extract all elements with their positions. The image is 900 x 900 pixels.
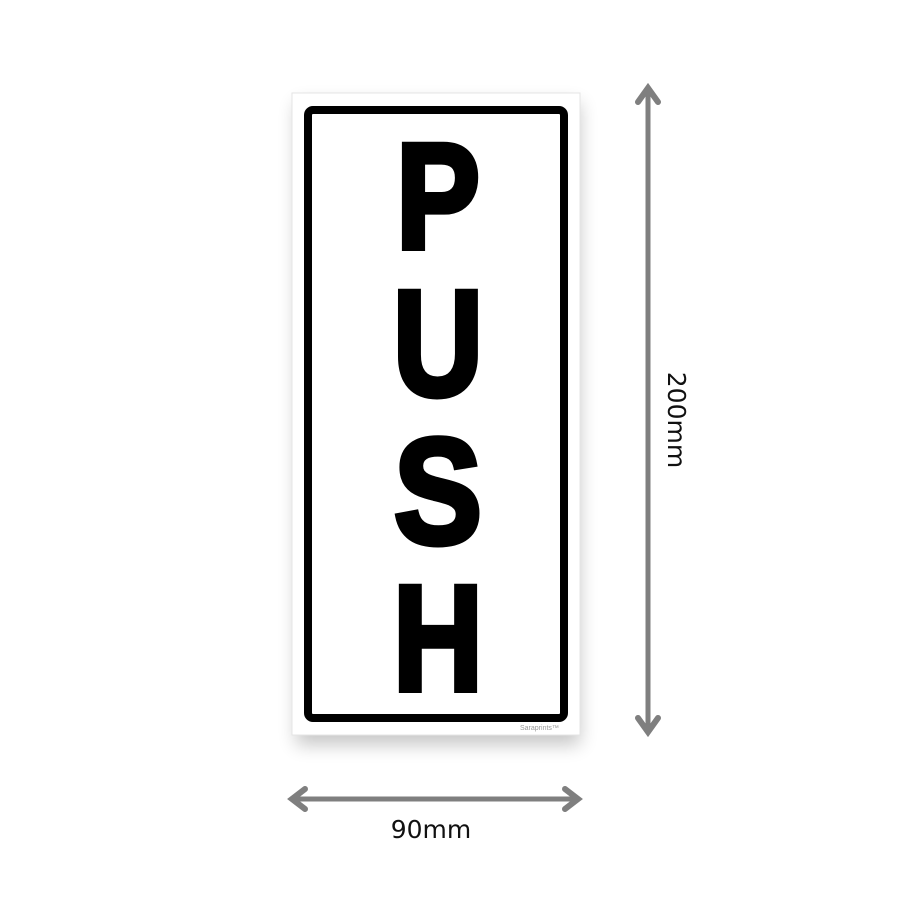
label: 200mm: 200mm — [662, 372, 691, 468]
label: 90mm: 90mm — [391, 815, 471, 844]
sign text: PUSH: P — [396, 112, 480, 280]
sign text: PUSH: S — [394, 407, 482, 575]
sign panel — [292, 93, 580, 745]
sign text: PUSH: H — [393, 554, 483, 722]
brand mark: Saraprints™ — [520, 725, 559, 732]
sign text: PUSH — [393, 112, 483, 722]
sign text: PUSH: U — [393, 259, 483, 427]
arrow: vertical 200mm — [638, 88, 658, 732]
arrow: horizontal 90mm — [292, 789, 578, 809]
sign border — [308, 110, 564, 718]
